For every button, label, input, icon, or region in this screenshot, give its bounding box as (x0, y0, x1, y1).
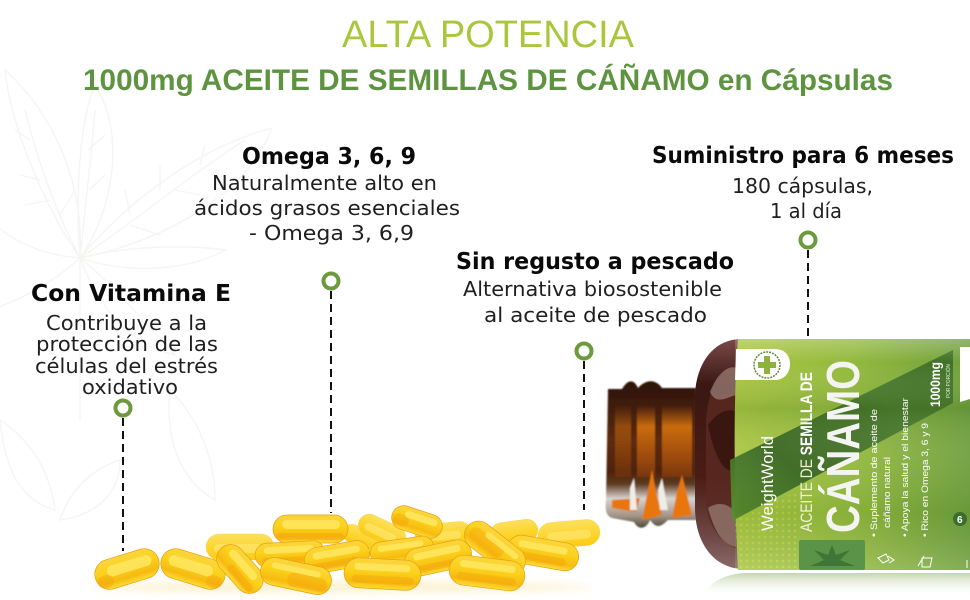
leader line: Omega (324, 274, 338, 513)
callout: Sin regusto a pescado: al aceite de pescado (484, 303, 707, 327)
capsule shadows (90, 581, 590, 593)
bullet list (869, 398, 931, 537)
title line 1: ALTA POTENCIA (342, 14, 635, 56)
callout: Suministro para 6 meses (652, 143, 954, 223)
leaf square (799, 540, 865, 570)
white top right panel (960, 347, 970, 402)
callout: Omega 3, 6, 9: Omega 3, 6, 9 (242, 144, 416, 170)
product name: CÁÑAMO (817, 360, 869, 533)
background hemp leaf watermark (0, 70, 272, 520)
halftone (735, 490, 800, 570)
callout: Omega 3, 6, 9 (194, 144, 460, 245)
leader line: Sin regusto (576, 344, 592, 510)
leader line: Vitamina E (116, 400, 130, 551)
dose: 1000mg (927, 362, 943, 407)
bullet list: • Suplemento de aceite de (869, 409, 880, 537)
bottle reflection (705, 573, 970, 596)
diagonal band (730, 350, 953, 521)
callout: Sin regusto a pescado: Sin regusto a pescado (456, 249, 734, 275)
callout: Con Vitamina E: oxidativo (82, 375, 178, 399)
months badge: 6 (957, 515, 963, 526)
bottle neck (606, 381, 696, 528)
callout: Omega 3, 6, 9: - Omega 3, 6,9 (249, 221, 414, 245)
bullet list: • Rico en Omega 3, 6 y 9 (920, 423, 931, 537)
callout: Suministro para 6 meses: 1 al día (770, 199, 842, 223)
callout: Con Vitamina E (31, 281, 231, 399)
callout: Sin regusto a pescado: Alternativa biosostenible (463, 277, 722, 301)
callout: Omega 3, 6, 9: ácidos grasos esenciales (194, 196, 460, 220)
callout: Con Vitamina E: protección de las (36, 332, 218, 356)
title (83, 14, 893, 97)
callout: Con Vitamina E: células del estrés (35, 354, 218, 378)
callout: Sin regusto a pescado (456, 249, 734, 327)
white logo tab (735, 349, 790, 380)
title line 2: 1000mg ACEITE DE SEMILLAS DE CÁÑAMO en Cápsulas (83, 63, 893, 97)
bullet list: • Apoya la salud y el bienestar (900, 398, 911, 537)
callout: Suministro para 6 meses: Suministro para 6 meses (652, 143, 954, 169)
product line: ACEITE DE SEMILLA DE (797, 372, 816, 532)
callout: Omega 3, 6, 9: Naturalmente alto en (212, 171, 437, 195)
leader line: Suministro (800, 232, 816, 338)
bullet list: cáñamo natural (882, 457, 893, 528)
capsules pile (90, 503, 601, 599)
certification badge (754, 352, 780, 378)
product bottle (606, 339, 970, 596)
bottle label (735, 339, 970, 570)
callout: Suministro para 6 meses: 180 cápsulas, (732, 174, 873, 198)
callout: Con Vitamina E: Con Vitamina E (31, 281, 231, 307)
callout: Con Vitamina E: Contribuye a la (46, 311, 207, 335)
product bottle: POR PORCIÓN (945, 364, 952, 398)
shading (735, 339, 970, 570)
brand name: WeightWorld (758, 436, 777, 531)
months badge (953, 512, 967, 526)
small label icons (878, 554, 967, 568)
bottle shoulder (695, 339, 742, 569)
